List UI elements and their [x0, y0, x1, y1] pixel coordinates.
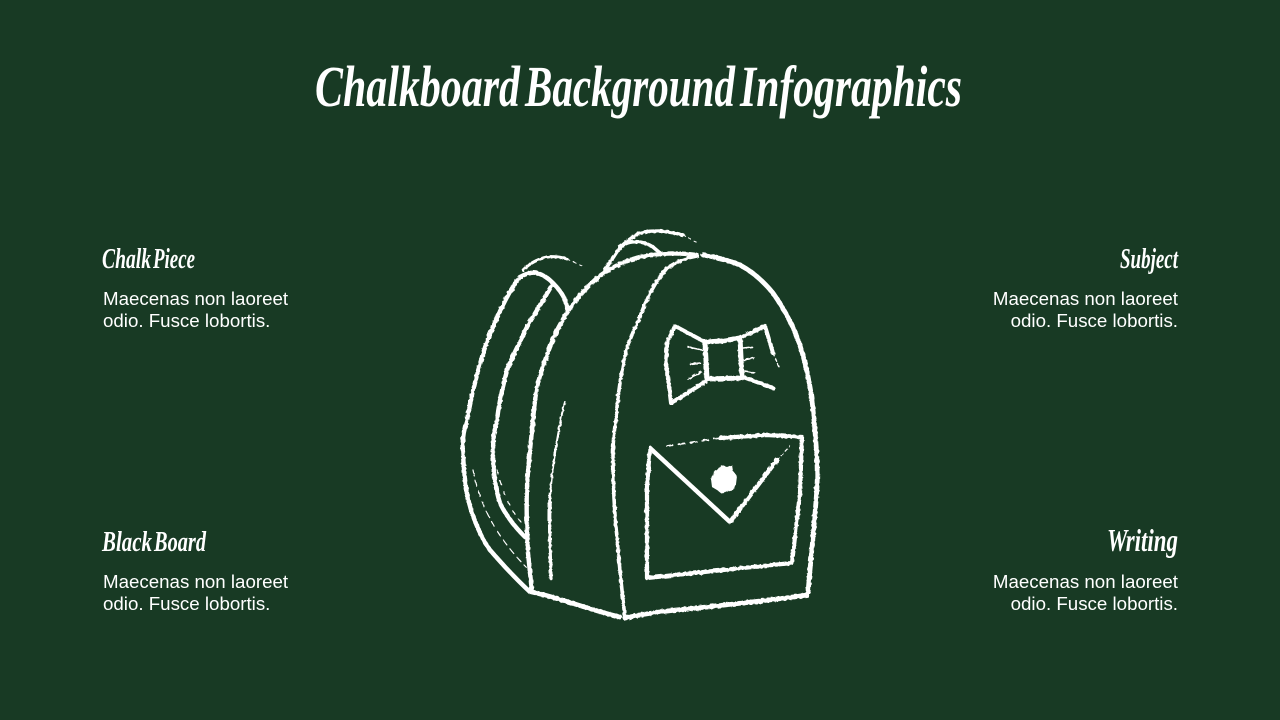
text block: Chalk Piece description: odio. Fusce lobortis. [103, 310, 270, 331]
text block: Writing description: odio. Fusce lobortis. [1011, 593, 1178, 614]
backpack: strap top curve [520, 273, 568, 310]
backpack: bottom right edge [625, 595, 807, 618]
backpack: inner handle [620, 242, 660, 253]
backpack: front panel edge [613, 256, 697, 618]
backpack: main body left edge [527, 254, 697, 592]
backpack: bottom left edge [532, 592, 620, 617]
text block: Subject description: odio. Fusce lobortis. [1011, 310, 1178, 331]
heading: Black Board: Black [101, 526, 152, 558]
backpack: right edge [703, 255, 817, 593]
panel: Subject [993, 243, 1179, 331]
backpack: outer shoulder strap [463, 277, 530, 592]
pocket: outline [647, 435, 802, 578]
bow: centre knot [705, 338, 742, 379]
backpack: strap top shadow [523, 257, 567, 270]
panel: Chalk Piece [102, 243, 289, 331]
text block: Writing description: Maecenas non laoreet [993, 571, 1179, 592]
backpack: inner shoulder strap [493, 285, 552, 537]
panel: Black Board [101, 526, 289, 614]
heading: Writing: Writing [1107, 522, 1178, 558]
text block: Black Board description: Maecenas non laoreet [103, 571, 289, 592]
panel: Writing [993, 522, 1179, 614]
bow: right wing [740, 326, 773, 353]
pocket: flap [650, 448, 777, 522]
text block: Chalk Piece description: Maecenas non laoreet [103, 288, 289, 309]
backpack: top handle [605, 231, 683, 270]
backpack: side seam [550, 402, 565, 497]
heading: Black Board [101, 526, 206, 558]
heading: Subject: Subject [1120, 243, 1179, 275]
bow: crease lines [688, 347, 755, 379]
text block: Black Board description: odio. Fusce lobortis. [103, 593, 270, 614]
icon: chalk backpack [463, 231, 817, 618]
backpack: side stitching [473, 470, 526, 567]
heading: Chalk Piece: Chalk [102, 243, 151, 275]
heading: Black Board: Board [153, 526, 206, 558]
title: Background [524, 54, 736, 119]
text block: Subject description: Maecenas non laoreet [993, 288, 1179, 309]
pocket: button [711, 465, 737, 494]
title: Chalkboard [315, 54, 521, 119]
title: Infographics [739, 54, 962, 119]
heading: Chalk Piece: Piece [152, 243, 195, 275]
title [315, 54, 962, 119]
bow: left wing [666, 326, 705, 403]
